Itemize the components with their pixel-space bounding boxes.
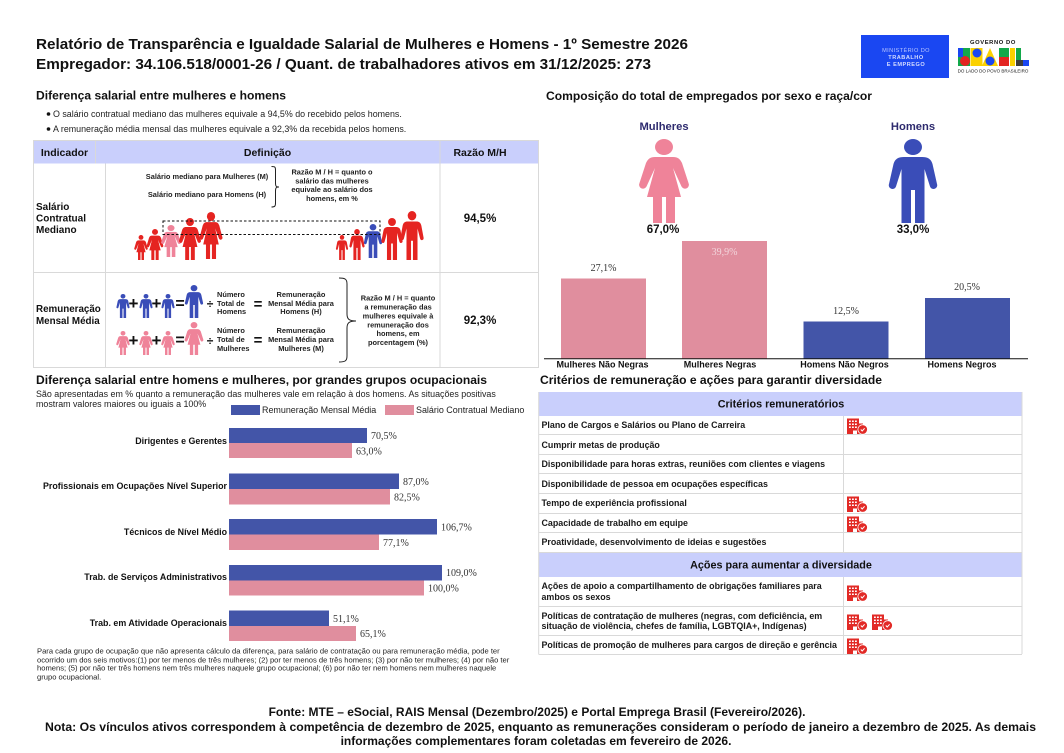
row label: remuneração mensal média	[36, 304, 101, 327]
logo: governo do brasil	[958, 40, 1029, 74]
group: dirigentes: Dirigentes e Gerentes	[135, 436, 227, 446]
group: técnicos	[124, 519, 472, 550]
logo: ministério do trabalho e emprego: MINISTÉRIO DO	[882, 47, 930, 54]
table header	[41, 147, 507, 159]
group: serviços administrativos: 100,0%	[428, 584, 459, 594]
bar chart: composição por raça/cor: Homens Não Negros	[800, 360, 889, 370]
header: critérios remuneratórios: Critérios remuneratórios	[718, 398, 844, 410]
pictogram: homens	[889, 121, 937, 236]
formula: men: Homens (H)	[280, 307, 322, 316]
definition note: razão m/h salário: equivale ao salário dos	[291, 185, 373, 194]
definition note: razão m/h remuneração: a remuneração das	[364, 302, 432, 312]
definition note: razão m/h salário: Razão M / H = quanto o	[291, 168, 373, 176]
action rows	[542, 581, 837, 650]
row label: remuneração mensal média: Remuneração	[36, 304, 101, 315]
formula: men: =	[254, 296, 263, 313]
formula: men: Total de	[217, 299, 245, 308]
criteria rows: Plano de Cargos e Salários ou Plano de Carreira	[542, 420, 745, 430]
formula: women: Remuneração	[277, 326, 326, 335]
section heading: grupos ocupacionais: Diferença salarial entre homens e mulheres, por grandes grupos ocupacionais	[36, 373, 487, 387]
definition labels: mediano: Salário mediano para Mulheres (M)	[146, 172, 269, 181]
formula: men: Remuneração	[277, 290, 326, 299]
bar chart: composição por raça/cor: 27,1%	[591, 263, 616, 274]
pictogram: homens: Homens	[891, 121, 935, 133]
panel: criteria table	[538, 392, 1022, 654]
definition note: razão m/h remuneração: mulheres equivale à	[363, 312, 434, 320]
value: 94,5%: 94,5%	[464, 213, 496, 225]
formula: women: ÷	[207, 334, 214, 348]
bullet text block: O salário contratual mediano das mulheres equivale a 94,5% do recebido pelos homens.	[53, 109, 402, 119]
action rows: Políticas de promoção de mulheres para cargos de direção e gerência	[542, 640, 837, 650]
bar chart: composição por raça/cor: 12,5%	[833, 306, 859, 317]
chart description: São apresentadas em % quanto a remuneração das mulheres vale em relação à dos homens. As situações positivas	[36, 389, 496, 399]
definition labels: mediano	[146, 172, 269, 199]
chart description: mostram valores maiores ou iguais a 100%	[36, 399, 206, 409]
formula: men: ÷	[207, 297, 214, 311]
source and notes: informações complementares foram coletadas em fevereiro de 2026.	[341, 734, 731, 748]
formula: men: +	[129, 294, 139, 313]
group: serviços administrativos: 109,0%	[446, 568, 477, 579]
large brace	[339, 278, 356, 362]
bar chart: composição por raça/cor: 39,9%	[712, 247, 737, 258]
logo: governo do brasil: DO LADO DO POVO BRASILEIRO	[958, 68, 1029, 74]
group: profissionais: 82,5%	[394, 492, 420, 504]
footnote: grupo ocupacional.	[37, 672, 101, 682]
formula: women: =	[254, 332, 263, 349]
group: técnicos: 106,7%	[441, 522, 472, 534]
group: atividade operacionais: 51,1%	[333, 614, 359, 625]
definition note: razão m/h remuneração: Razão M / H = quanto	[361, 294, 436, 302]
legend: Salário Contratual Mediano	[416, 405, 524, 415]
formula: men: =	[175, 296, 185, 312]
formula: women: +	[129, 331, 139, 350]
panel: indicator table	[34, 140, 538, 368]
bar chart: composição por raça/cor: Homens Negros	[927, 360, 997, 370]
group: dirigentes: 70,5%	[371, 431, 397, 442]
group: atividade operacionais	[90, 610, 386, 641]
bar chart: composição por raça/cor: Mulheres Não Negras	[556, 360, 649, 370]
title: Empregador: 34.106.518/0001-26 / Quant. de trabalhadores ativos em 31/12/2025: 273	[36, 56, 651, 73]
group: técnicos: 77,1%	[383, 538, 409, 549]
row label: salário contratual mediano	[36, 202, 86, 236]
value: 92,3%: 92,3%	[464, 315, 496, 327]
group: serviços administrativos: Trab. de Serviços Administrativos	[84, 572, 227, 582]
bar chart: composição por raça/cor: 20,5%	[954, 282, 980, 293]
legend	[231, 405, 524, 415]
title	[36, 36, 688, 73]
formula: women	[116, 322, 335, 355]
criteria rows: Tempo de experiência profissional	[542, 498, 687, 508]
group: atividade operacionais: Trab. em Atividade Operacionais	[90, 618, 227, 628]
formula: men: Homens	[217, 307, 246, 316]
formula: women: =	[175, 332, 185, 349]
table header: Definição	[244, 147, 291, 159]
formula: women: +	[152, 331, 162, 350]
pictogram: mulheres	[639, 121, 689, 236]
formula: men: +	[152, 294, 162, 313]
group: técnicos: Técnicos de Nível Médio	[124, 527, 228, 537]
formula: men: Mensal Média para	[268, 299, 335, 308]
pictogram: mulheres: 67,0%	[647, 224, 679, 236]
group: serviços administrativos	[84, 565, 477, 596]
definition labels: mediano: Salário mediano para Homens (H)	[148, 190, 267, 199]
table header: Razão M/H	[453, 147, 507, 159]
bar chart: composição por raça/cor: Mulheres Negras	[684, 360, 756, 370]
footnote: ocorrido um dos seis motivos:(1) por ter menos de três mulheres; (2) por ter menos de três homens; (3) por não ter mulheres; (4) por não ter	[37, 656, 510, 664]
section heading: composição: Composição do total de empregados por sexo e raça/cor	[546, 89, 872, 103]
brace	[272, 166, 279, 207]
action rows: ambos os sexos	[542, 592, 611, 602]
action rows: Políticas de contratação de mulheres (negras, com deficiência, em	[542, 611, 822, 621]
definition note: razão m/h salário	[291, 168, 373, 203]
group: profissionais: Profissionais em Ocupações Nível Superior	[43, 481, 228, 491]
chart description	[36, 389, 496, 409]
formula: men: Número	[217, 290, 245, 299]
formula: women: Número	[217, 326, 245, 335]
source and notes	[45, 705, 1036, 748]
definition note: razão m/h salário: homens, em %	[306, 194, 358, 203]
action rows: Ações de apoio a compartilhamento de obrigações familiares para	[542, 581, 822, 591]
table header: Indicador	[41, 147, 88, 159]
logo: ministério do trabalho e emprego	[861, 35, 949, 78]
footnote	[37, 646, 510, 682]
title: Relatório de Transparência e Igualdade Salarial de Mulheres e Homens - 1º Semestre 2026	[36, 36, 688, 53]
bullet text block: A remuneração média mensal das mulheres equivale a 92,3% da recebida pelos homens.	[53, 124, 406, 134]
formula: women: Total de	[217, 335, 245, 344]
section heading: diferença salarial: Diferença salarial entre mulheres e homens	[36, 88, 286, 102]
pictogram: homens: 33,0%	[897, 224, 929, 236]
footnote: homens; (5) por não ter três homens nem três mulheres naquele grupo ocupacional; (6) por não ter nem homens nem mulheres naquele	[37, 664, 496, 672]
bullet text block	[47, 109, 406, 134]
company icons	[847, 418, 892, 654]
bar chart: composição por raça/cor	[544, 241, 1028, 370]
pictogram: mulheres: Mulheres	[639, 121, 689, 133]
definition note: razão m/h remuneração: porcentagem (%)	[368, 338, 429, 347]
criteria rows	[542, 420, 825, 547]
criteria rows: Proatividade, desenvolvimento de ideias e sugestões	[542, 537, 766, 547]
criteria rows: Disponibilidade para horas extras, reuniões com clientes e viagens	[542, 459, 825, 469]
group: dirigentes: 63,0%	[356, 446, 382, 458]
header: ações para aumentar a diversidade: Ações para aumentar a diversidade	[690, 560, 872, 572]
criteria rows: Cumprir metas de produção	[542, 440, 660, 450]
definition note: razão m/h remuneração	[361, 294, 436, 347]
footnote: Para cada grupo de ocupação que não apresenta cálculo da diferença, para salário de contratação ou para remuneração média, pode ter	[37, 646, 500, 656]
group: profissionais: 87,0%	[403, 477, 429, 488]
formula: women: Mulheres	[217, 344, 249, 353]
dashed median box	[163, 221, 380, 234]
logo: ministério do trabalho e emprego: E EMPREGO	[887, 62, 925, 68]
group: profissionais	[43, 474, 429, 504]
formula: women: Mulheres (M)	[278, 344, 324, 353]
source and notes: Nota: Os vínculos ativos correspondem à competência de dezembro de 2025, enquanto as remunerações consideram o período de janeiro a dezembro de 2025. As demais	[45, 720, 1036, 734]
criteria rows: Capacidade de trabalho em equipe	[542, 518, 688, 528]
people: women ordered by salary	[134, 212, 222, 260]
row label: salário contratual mediano: Mediano	[36, 225, 77, 236]
row label: salário contratual mediano: Salário	[36, 202, 69, 213]
row label: salário contratual mediano: Contratual	[36, 214, 86, 224]
definition note: razão m/h remuneração: remuneração dos	[367, 320, 429, 330]
people: men ordered by salary	[336, 211, 424, 260]
criteria rows: Disponibilidade de pessoa em ocupações específicas	[542, 479, 768, 489]
group: atividade operacionais: 65,1%	[360, 629, 386, 640]
definition note: razão m/h salário: salário das mulheres	[295, 176, 369, 186]
logo: ministério do trabalho e emprego: TRABALHO	[888, 55, 924, 61]
source and notes: Fonte: MTE – eSocial, RAIS Mensal (Dezembro/2025) e Portal Emprega Brasil (Fevereiro/2026).	[269, 705, 805, 719]
row label: remuneração mensal média: Mensal Média	[36, 316, 100, 327]
action rows: situação de violência, chefes de família, LGBTQIA+, Indígenas)	[542, 621, 807, 631]
legend: Remuneração Mensal Média	[262, 405, 376, 415]
group: dirigentes	[135, 428, 397, 458]
bar chart: grupos ocupacionais	[43, 428, 477, 641]
section heading: critérios: Critérios de remuneração e ações para garantir diversidade	[540, 373, 882, 387]
definition note: razão m/h remuneração: homens, em	[376, 329, 420, 338]
logo: governo do brasil: GOVERNO DO	[970, 40, 1016, 46]
formula: women: Mensal Média para	[268, 335, 335, 344]
formula: men	[116, 285, 335, 318]
